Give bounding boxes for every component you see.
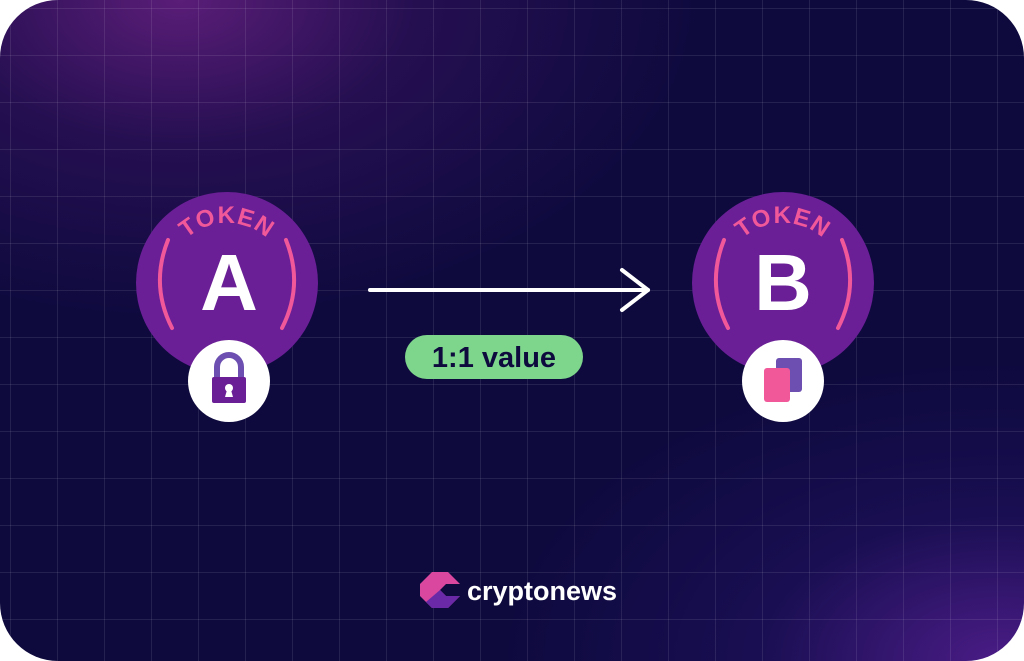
token A	[136, 192, 318, 422]
logo: cryptonews: cryptonews	[467, 576, 617, 606]
icon: copy	[742, 340, 824, 422]
label: 1:1 value: 1:1 value	[432, 342, 556, 374]
token B	[692, 192, 874, 422]
label: 1:1 value	[405, 335, 583, 379]
token A: TOKEN	[177, 206, 275, 236]
logo: cryptonews	[420, 572, 617, 608]
icon: lock	[188, 340, 270, 422]
token B: TOKEN	[733, 206, 831, 236]
token B: B	[754, 238, 812, 327]
token A: A	[200, 238, 258, 327]
arrow	[370, 270, 648, 310]
